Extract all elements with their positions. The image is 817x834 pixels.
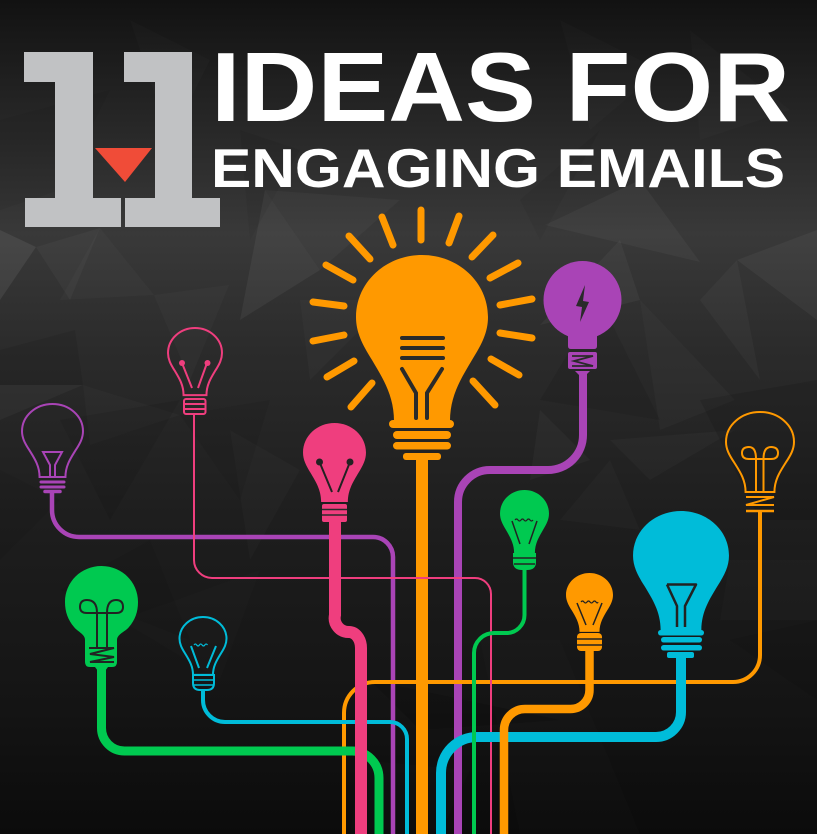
icon: big orange bulb [313, 210, 532, 460]
icon: big cyan bulb [633, 511, 729, 658]
wire: thin purple [52, 492, 393, 834]
title: number 11: 1 [151, 8, 196, 307]
icon: pink filled bulb [303, 423, 366, 522]
wire: medium orange [504, 650, 590, 834]
icon: cyan outline bulb [180, 617, 226, 690]
icon: purple bulb with lightning [544, 261, 622, 375]
wire: thick green [102, 668, 379, 834]
wire: thin pink [194, 414, 491, 834]
icon: green round bulb [65, 566, 138, 671]
icon: orange outline bulb [726, 412, 794, 511]
title: number 11: 1 [52, 8, 97, 307]
title: engaging emails: ENGAGING EMAILS [211, 137, 785, 199]
title: number 11 [24, 8, 220, 307]
wire: thick purple [458, 372, 583, 834]
icon: purple outline bulb [22, 404, 83, 492]
icon: small orange bulb [566, 573, 613, 651]
wire: thin orange [344, 510, 760, 834]
wire: main orange [416, 458, 428, 834]
icon: red triangle [95, 148, 152, 182]
wire: thick cyan [441, 656, 681, 834]
wires connecting the bulbs [52, 372, 760, 834]
bulb base [389, 420, 454, 460]
wire: thin green [474, 568, 524, 834]
bulb filament [402, 338, 443, 418]
icon: pink outline bulb [168, 328, 222, 414]
icon: small green bulb [500, 490, 549, 570]
wire: thick pink [335, 520, 361, 834]
bulb rays [313, 210, 532, 407]
wire: thin cyan [203, 689, 407, 834]
bulb body [356, 255, 488, 421]
title: ideas for: IDEAS FOR [211, 32, 790, 142]
